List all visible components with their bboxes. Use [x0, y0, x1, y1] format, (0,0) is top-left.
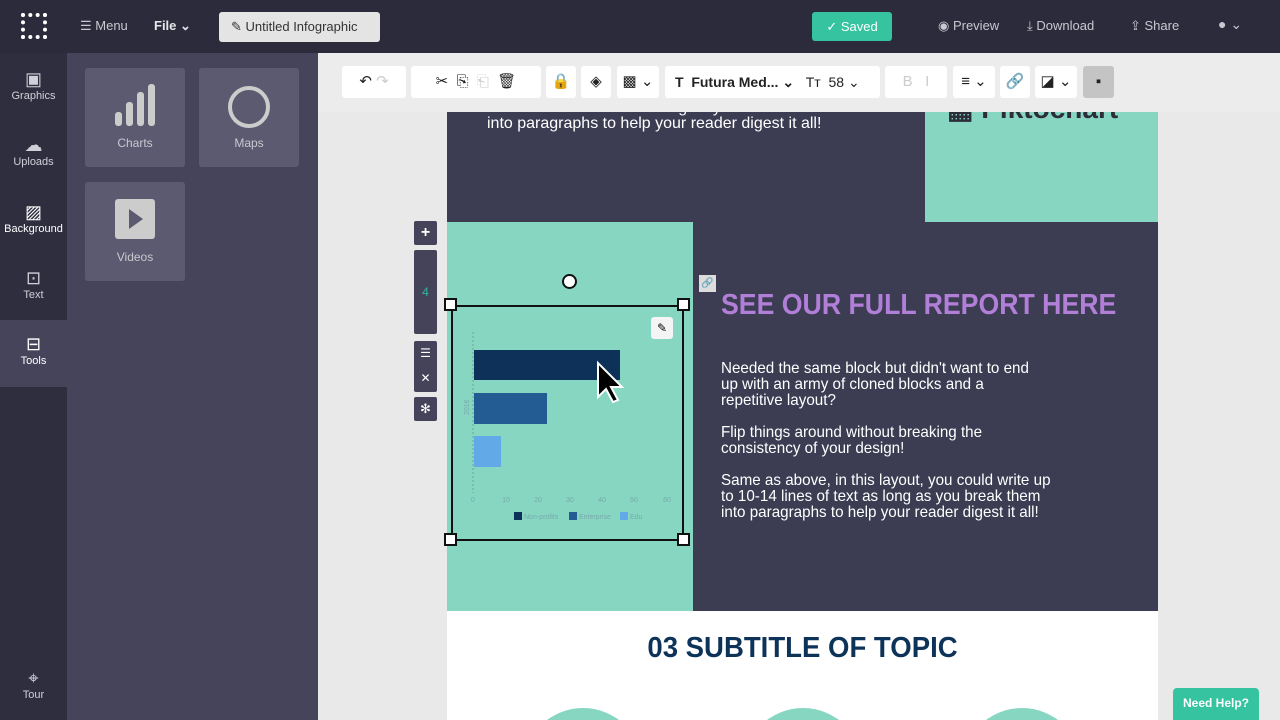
link icon [699, 275, 716, 292]
top text fragment [487, 99, 823, 132]
maps tile [199, 68, 299, 167]
side controls [414, 221, 437, 421]
uploads: Uploads [13, 156, 54, 168]
bar chart: 40 [598, 497, 606, 504]
toolbar: ◪ ⌄ [1041, 73, 1071, 90]
bar chart: 20 [534, 497, 542, 504]
graphics: ▣ [25, 69, 42, 89]
body text: repetitive layout? [721, 392, 836, 409]
graphics: Graphics [11, 90, 56, 102]
side controls: + [421, 224, 430, 241]
body text: Same as above, in this layout, you could write up [721, 472, 1051, 489]
file menu: File ⌄ [154, 18, 191, 33]
charts tile: Charts [117, 136, 153, 150]
side controls: ☰ [420, 346, 431, 360]
text [23, 268, 44, 301]
bar chart: 60 [663, 497, 671, 504]
bar chart: 0 [471, 497, 475, 504]
share: ⇪ Share [1130, 18, 1179, 33]
body text [721, 360, 1051, 521]
tools active: Tools [21, 355, 46, 367]
body text: to 10-14 lines of text as long as you break them [721, 488, 1040, 505]
tools active: ⊟ [26, 334, 41, 354]
toolbar: B I [903, 73, 929, 90]
toolbar: ◈ [590, 73, 602, 90]
toolbar: ▪ [1096, 73, 1101, 90]
videos tile [85, 182, 185, 281]
need help button [1173, 688, 1259, 720]
tour: Tour [23, 689, 44, 701]
toolbar: 🔗 [1006, 73, 1024, 90]
toolbar: ▩ ⌄ [623, 73, 653, 90]
title field: ✎ Untitled Infographic [231, 19, 358, 34]
edit pencil [651, 317, 673, 339]
maps tile: Maps [234, 136, 264, 150]
uploads [13, 135, 54, 168]
uploads: ☁ [24, 135, 42, 155]
toolbar: ≡ ⌄ [961, 73, 987, 90]
title field [219, 12, 380, 42]
saved button [812, 12, 892, 41]
report heading: SEE OUR FULL REPORT HERE [721, 289, 1116, 321]
text: Text [23, 289, 44, 301]
preview: ◉ Preview [938, 18, 999, 33]
toolbar: ✂ ⎘ ⎗ 🗑 [436, 73, 516, 90]
left icon sidebar [0, 53, 67, 720]
logo [21, 13, 47, 39]
body text: into paragraphs to help your reader digest it all! [721, 504, 1039, 521]
bar chart: 10 [502, 497, 510, 504]
top text fragment: to 10-14 lines of text as long as you break them [487, 99, 823, 116]
graphics [11, 69, 56, 102]
canvas dark section [447, 98, 1158, 611]
edit pencil: ✎ [657, 321, 667, 335]
top bar [0, 0, 1280, 53]
side controls: ✕ [420, 371, 431, 385]
background: ▨ [25, 202, 42, 222]
tour: ⌖ [28, 668, 39, 688]
bar chart: Edu [630, 514, 643, 521]
videos tile: Videos [117, 250, 153, 264]
toolbar: 🔒 [552, 73, 570, 90]
background [4, 202, 63, 235]
teal logo block [925, 98, 1158, 222]
link icon: 🔗 [701, 278, 714, 289]
bar chart: Enterprise [579, 514, 611, 521]
saved button: ✓ Saved [826, 19, 878, 34]
bar chart: 50 [630, 497, 638, 504]
toolbar [318, 53, 1280, 112]
tools panel [67, 53, 318, 720]
body text: Flip things around without breaking the [721, 424, 982, 441]
tools active [0, 320, 67, 387]
user: ● ⌄ [1218, 16, 1242, 32]
toolbar: T Futura Med... ⌄ Tт 58 ⌄ [675, 74, 860, 90]
handles [444, 298, 457, 311]
circles [547, 708, 1058, 720]
charts tile [85, 68, 185, 167]
bar chart: 30 [566, 497, 574, 504]
bar chart [464, 332, 671, 521]
bar chart: 2016 [464, 399, 471, 415]
need help button: Need Help? [1183, 696, 1249, 710]
subtitle: 03 SUBTITLE OF TOPIC [647, 632, 958, 664]
body text: up with an army of cloned blocks and a [721, 376, 984, 393]
tour [23, 668, 44, 701]
side controls: 4 [422, 285, 429, 299]
chart selection [451, 305, 684, 541]
body text: consistency of your design! [721, 440, 904, 457]
menu: ☰ Menu [80, 18, 128, 33]
toolbar: ↶ ↷ [359, 73, 389, 90]
top text fragment: into paragraphs to help your reader digest it all! [487, 115, 821, 132]
text: ⊡ [26, 268, 41, 288]
body text: Needed the same block but didn't want to end [721, 360, 1029, 377]
white section [447, 611, 1158, 720]
background: Background [4, 223, 63, 235]
bar chart: Non-profits [524, 514, 559, 521]
teal chart block [447, 222, 693, 611]
side controls: ✻ [420, 401, 431, 416]
download: ⤓ Download [1027, 18, 1094, 33]
